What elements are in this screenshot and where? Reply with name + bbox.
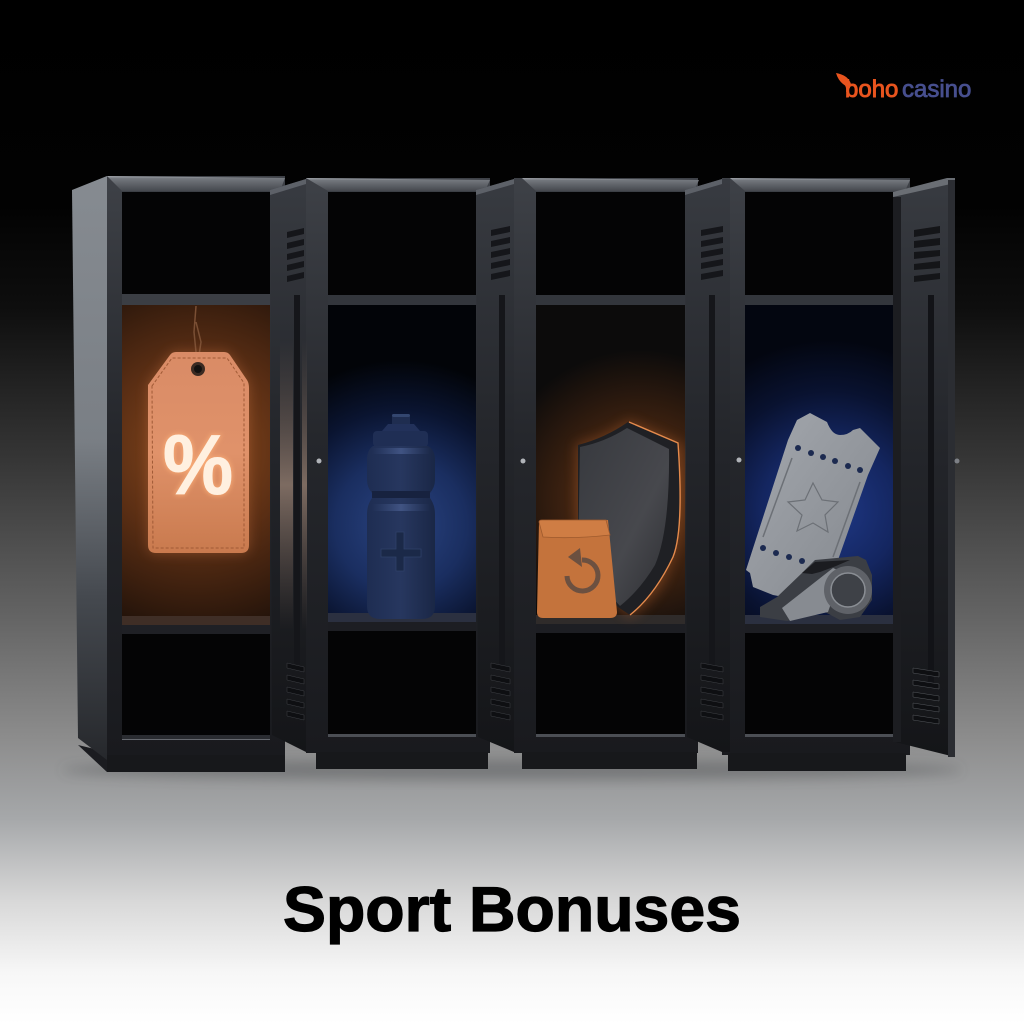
icon: shield: [576, 420, 682, 618]
icon: price tag: %: [163, 418, 233, 512]
locker 3: [514, 178, 699, 769]
icon: whistle: [760, 556, 872, 621]
logo: boho: [845, 76, 898, 103]
icon: price tag: [148, 306, 249, 553]
title: Sport Bonuses: [283, 875, 741, 945]
logo: [836, 73, 971, 103]
icon: orange pouch: [537, 520, 617, 618]
door 4: [893, 178, 960, 757]
door 2: [476, 179, 526, 752]
icon: water bottle: [367, 414, 435, 619]
door 3: [685, 179, 742, 752]
locker 2: [306, 178, 490, 769]
icon: ticket: [746, 413, 880, 600]
door 1: [270, 179, 322, 752]
floor shadow: [62, 760, 962, 780]
logo: casino: [902, 76, 971, 103]
locker 1: [72, 176, 285, 772]
icon: price tag: %: [163, 418, 233, 512]
locker 4: [722, 178, 910, 771]
